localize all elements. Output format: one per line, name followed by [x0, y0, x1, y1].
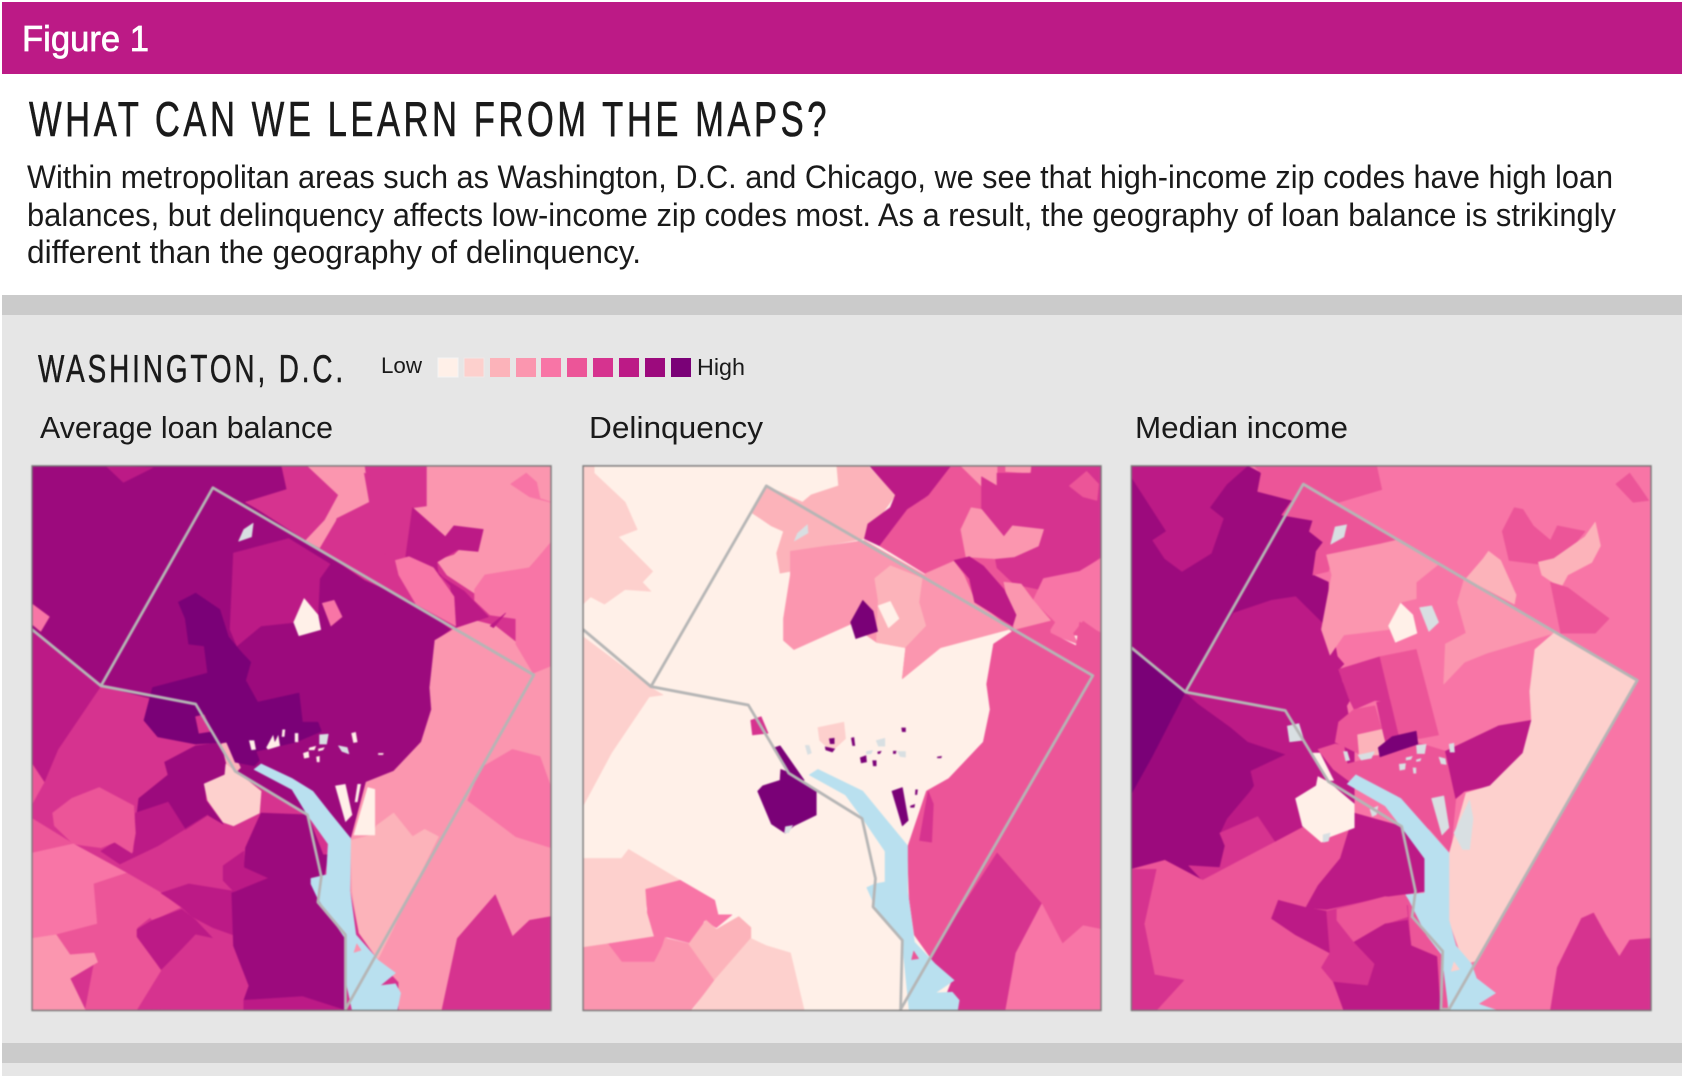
south-west regions: [137, 742, 235, 829]
high-delinquency patches: [758, 769, 816, 833]
river: [1347, 775, 1497, 1010]
eastern regions: [908, 622, 1101, 957]
map frame: [583, 466, 1101, 1010]
body text: different than the geography of delinquency.: [27, 234, 641, 270]
DC and state boundary lines: [32, 488, 534, 1009]
western regions: [1131, 648, 1185, 795]
legend: [381, 353, 745, 380]
north-west and central DC: [32, 466, 450, 840]
map frame: [32, 466, 551, 1010]
header bar: [2, 2, 1682, 74]
north-east regions: [1502, 508, 1585, 564]
map: average loan balance: [30, 464, 553, 1012]
pale park: [204, 764, 261, 826]
central DC: [1321, 540, 1439, 655]
body text: balances, but delinquency affects low-income zip codes most. As a result, the geography of loan balance is strikingly: [27, 197, 1616, 233]
figure label: Figure 1: [22, 18, 149, 59]
north-east regions: [864, 466, 951, 546]
title: WHAT CAN WE LEARN FROM THE MAPS?: [29, 93, 830, 147]
DC and state boundary lines: [1131, 484, 1637, 1009]
base under north-east: [924, 466, 1101, 636]
eastern DC: [1449, 633, 1637, 964]
map heading: average loan balance: Average loan balance: [40, 410, 333, 445]
park: [1296, 777, 1354, 842]
river: [254, 764, 401, 1010]
river: [809, 769, 959, 1010]
DC and state boundary lines: [583, 486, 1093, 1009]
legend: High: [697, 354, 745, 380]
north-east regions: [413, 466, 551, 593]
map: delinquency: [582, 464, 1103, 1012]
city heading: WASHINGTON, D.C.: [38, 348, 346, 391]
map heading: median income: Median income: [1135, 410, 1348, 445]
legend: Low: [381, 353, 422, 378]
western pale regions: [583, 466, 653, 604]
northern DC regions: [753, 466, 895, 573]
body text: [27, 159, 1616, 270]
map panel background: [2, 295, 1682, 1076]
map: median income: [1130, 464, 1653, 1012]
map frame: [1131, 466, 1651, 1010]
grey no-data spots: [784, 524, 906, 833]
panel top band: [2, 295, 1682, 315]
panel bottom band: [2, 1043, 1682, 1063]
text and legend layer: [22, 18, 1616, 445]
base under west and south-west: [1186, 637, 1356, 833]
eastern regions: [350, 620, 552, 1010]
grey no-data spots: [1287, 723, 1455, 817]
central DC patches: [230, 539, 330, 646]
south-west regions: [1132, 827, 1303, 881]
body text: Within metropolitan areas such as Washington, D.C. and Chicago, we see that high-income zip codes have high loan: [27, 159, 1613, 195]
map heading: delinquency: Delinquency: [589, 410, 764, 445]
small spots: [249, 729, 384, 822]
